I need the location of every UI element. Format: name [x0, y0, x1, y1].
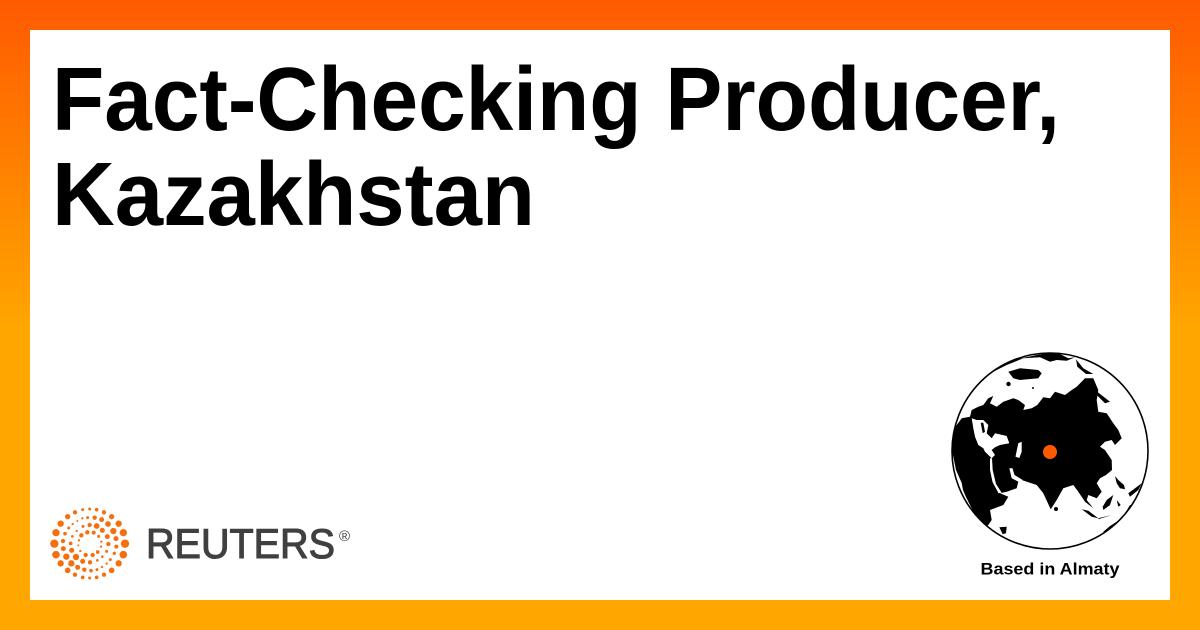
- Philippines: [1115, 476, 1125, 489]
- title: Fact-Checking Producer,: [52, 50, 1060, 150]
- location marker: Almaty: [1043, 445, 1057, 459]
- Caspian Sea: [1016, 442, 1022, 458]
- Borneo: [1103, 495, 1113, 510]
- icon: Reuters dot mark: [50, 507, 129, 579]
- landmasses: [945, 353, 1142, 537]
- Red Sea: [990, 458, 1002, 493]
- Mediterranean and Black Sea: [972, 418, 1009, 458]
- wordmark: REUTERS: REUTERS: [146, 520, 335, 567]
- globe outline: [952, 353, 1148, 549]
- New Guinea: [1128, 483, 1142, 497]
- Sri Lanka: [1054, 507, 1058, 511]
- Sakhalin: [1097, 392, 1110, 404]
- location label: Based in Almaty: [980, 560, 1120, 578]
- Eurasia and Africa: [945, 378, 1122, 527]
- Madagascar: [999, 527, 1007, 534]
- Italy: [981, 423, 985, 433]
- registered mark: ®: [339, 528, 350, 545]
- Arctic rim band: [994, 354, 1075, 372]
- Sulawesi: [1117, 500, 1121, 507]
- globe locator map: [945, 353, 1148, 549]
- Arctic island: [1008, 368, 1042, 380]
- Java: [1098, 515, 1112, 519]
- Australia: [1103, 505, 1131, 532]
- Sumatra: [1082, 509, 1098, 518]
- Persian Gulf: [1009, 468, 1023, 482]
- title: Kazakhstan: [52, 145, 535, 245]
- Reuters logo: [50, 507, 350, 579]
